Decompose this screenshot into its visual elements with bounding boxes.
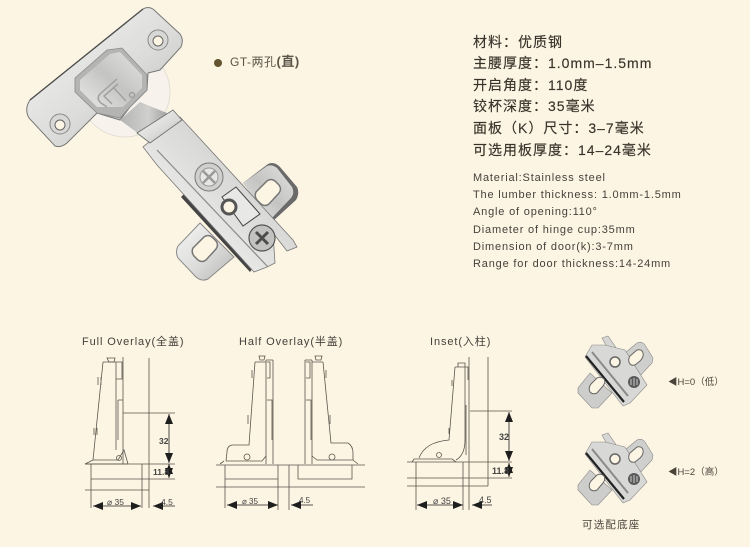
dimension 4.5: 4.5 (161, 497, 173, 507)
product photo: hinge (26, 7, 298, 281)
spec line: cup depth: 铰杯深度：35毫米 (473, 98, 596, 114)
spec line: door: 面板（K）尺寸：3–7毫米 (473, 120, 645, 136)
spec line: board thickness: 可选用板厚度：14–24毫米 (473, 142, 652, 158)
diagram: half overlay (216, 356, 365, 510)
model label (214, 54, 300, 69)
diagram: inset (407, 357, 512, 510)
en line: diameter: Diameter of hinge cup:35mm (473, 224, 636, 236)
arm (143, 117, 297, 272)
spec line: angle: 开启角度：110度 (473, 77, 588, 93)
dimension 4.5: 4.5 (479, 495, 492, 505)
heading: inset: Inset(入柱) (430, 336, 491, 348)
wing lower (176, 223, 234, 280)
spec line: thickness: 主腰厚度：1.0mm–1.5mm (473, 55, 652, 71)
label H=0: ◀H=0（低） (668, 377, 724, 388)
cup (75, 48, 147, 118)
en line: door: Dimension of door(k):3-7mm (473, 241, 634, 253)
dimension 35: ⌀ 35 (107, 497, 124, 507)
dimension 32: 32 (159, 436, 169, 446)
neck (120, 102, 167, 140)
plate (27, 8, 182, 147)
diagram: full overlay (85, 357, 175, 508)
spec line: material: 材料：优质钢 (473, 34, 563, 50)
dimension 35: ⌀ 35 (433, 496, 451, 506)
plate holes (148, 30, 168, 50)
dimension 35: ⌀ 35 (242, 497, 258, 506)
model name: GT-两孔(直) (230, 54, 300, 69)
specs in Chinese (473, 34, 652, 158)
base strip (181, 194, 254, 272)
logo (98, 79, 134, 107)
dimension 11.8: 11.8 (492, 466, 509, 476)
label H=2: ◀H=2（高） (668, 467, 724, 478)
bullet dot (214, 59, 222, 67)
en line: angle: Angle of opening:110° (473, 206, 598, 218)
en line: material: Material:Stainless steel (473, 172, 606, 184)
dimension 32: 32 (499, 432, 509, 442)
base plate H=2 (578, 433, 653, 505)
screw lower (249, 225, 275, 251)
dimension 4.5: 4.5 (299, 496, 311, 505)
heading: half overlay: Half Overlay(半盖) (239, 336, 343, 348)
specs in English (473, 172, 682, 270)
en line: range: Range for door thickness:14-24mm (473, 258, 671, 270)
caption: optional base: 可选配底座 (582, 519, 640, 531)
cup disk (80, 47, 170, 137)
base plate H=0 (578, 336, 653, 408)
wing upper (243, 163, 298, 221)
en line: thickness: The lumber thickness: 1.0mm-1.5mm (473, 189, 682, 201)
adjust hole (222, 200, 236, 214)
heading: full overlay: Full Overlay(全盖) (82, 336, 184, 348)
dimension 11.8: 11.8 (153, 467, 169, 477)
screw upper (195, 163, 223, 191)
